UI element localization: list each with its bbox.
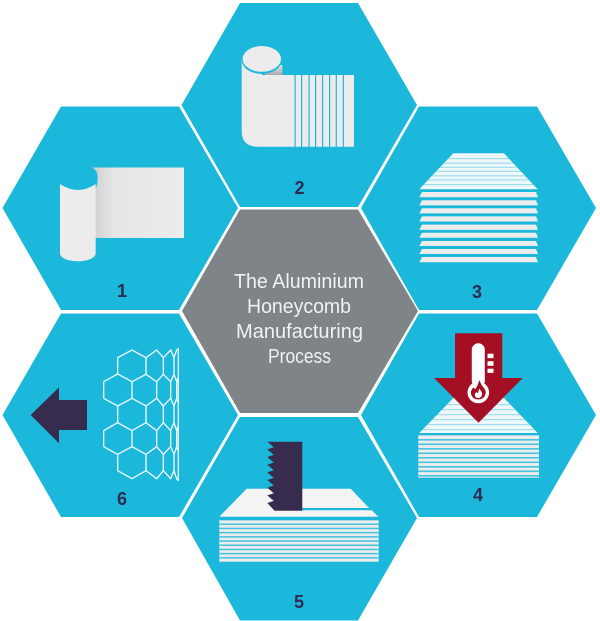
hexagon 3 (361, 106, 596, 310)
title: The Aluminium (234, 271, 364, 293)
hexagon 1 (2, 106, 238, 310)
panel: step 1 (2, 106, 238, 310)
icon: expanded honeycomb (104, 348, 178, 481)
panel: step 5 (182, 417, 417, 620)
title (234, 271, 364, 368)
number 3: 3 (472, 282, 482, 302)
number 1: 1 (117, 281, 127, 301)
hexagon 6 (2, 314, 238, 517)
icon: stacked sheets (415, 153, 545, 262)
number 2: 2 (294, 178, 305, 198)
title: Process (268, 346, 331, 368)
hexagon 5 (182, 417, 417, 620)
title: Manufacturing (236, 321, 363, 343)
centre hexagon (182, 210, 418, 413)
number 6: 6 (117, 489, 127, 509)
hexagon 2 (182, 3, 417, 207)
number 5: 5 (294, 592, 304, 612)
number 4: 4 (473, 485, 483, 505)
icon: heated stack (415, 333, 545, 478)
icon: roll with cut lines (242, 46, 354, 147)
icon: foil roll (60, 168, 184, 261)
icon: sawing stack (219, 442, 379, 562)
panel: step 6 (2, 314, 238, 517)
title: Honeycomb (247, 296, 351, 318)
panel: step 4 (361, 314, 596, 517)
icon: left arrow (31, 387, 87, 443)
panel: step 3 (361, 106, 596, 310)
hexagon 4 (361, 314, 596, 517)
panel: centre title (182, 210, 418, 413)
panel: step 2 (182, 3, 417, 207)
